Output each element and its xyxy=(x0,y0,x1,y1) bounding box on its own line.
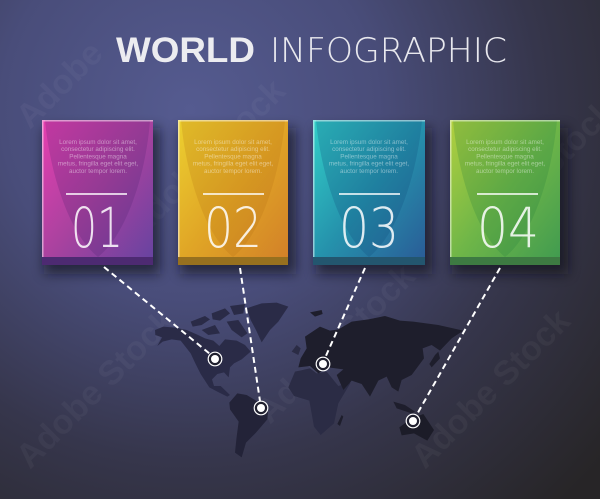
card 1: 01 xyxy=(71,196,123,260)
North America xyxy=(155,327,251,397)
card 3: metus, fringilla eget elit eget, xyxy=(329,161,409,168)
marker: Europe xyxy=(316,357,330,371)
card 1: auctor tempor lorem. xyxy=(69,168,127,175)
connector: card 2 to South America xyxy=(240,268,260,401)
card 1 xyxy=(42,120,160,274)
card 3: Pellentesque magna xyxy=(340,153,398,160)
card 4: 04 xyxy=(477,196,539,260)
card 4: auctor tempor lorem. xyxy=(476,168,534,175)
card 1: metus, fringilla eget elit eget, xyxy=(58,161,138,168)
card 1: Pellentesque magna xyxy=(69,153,127,160)
Eurasia xyxy=(298,316,463,397)
card 4: consectetur adipiscing elit. xyxy=(468,146,542,153)
watermarks: Adobe Stock xyxy=(9,302,183,476)
card 2: 02 xyxy=(204,196,262,260)
card 4: Lorem ipsum dolor sit amet, xyxy=(466,139,544,146)
Australia xyxy=(399,414,434,441)
card 3: 03 xyxy=(339,196,399,260)
Japan and islands xyxy=(429,352,440,367)
Iceland xyxy=(310,310,323,317)
title xyxy=(116,31,507,71)
South America xyxy=(229,393,268,457)
marker: Australia xyxy=(406,414,420,428)
card 4 xyxy=(450,120,568,274)
Africa xyxy=(288,368,351,435)
watermarks: Adobe xyxy=(9,34,110,136)
card 3: auctor tempor lorem. xyxy=(340,168,398,175)
card 2: consectetur adipiscing elit. xyxy=(196,146,270,153)
card 2: Lorem ipsum dolor sit amet, xyxy=(194,139,272,146)
card 1: consectetur adipiscing elit. xyxy=(61,146,135,153)
card 2 xyxy=(178,120,296,274)
connector: card 3 to Europe xyxy=(325,268,365,358)
card 3: Lorem ipsum dolor sit amet, xyxy=(330,139,408,146)
watermarks: Adobe Stock xyxy=(249,257,423,431)
card 1: Lorem ipsum dolor sit amet, xyxy=(59,139,137,146)
Greenland xyxy=(247,303,288,342)
card 2: metus, fringilla eget elit eget, xyxy=(193,161,273,168)
card 4: Pellentesque magna xyxy=(476,153,534,160)
card 3: consectetur adipiscing elit. xyxy=(332,146,406,153)
connector: card 4 to Australia xyxy=(416,268,500,416)
world map xyxy=(155,303,463,457)
marker: South America xyxy=(254,401,268,415)
Arctic islands xyxy=(191,304,247,337)
card 2: auctor tempor lorem. xyxy=(204,168,262,175)
card 3 xyxy=(313,120,432,274)
marker: North America xyxy=(208,352,222,366)
card 2: Pellentesque magna xyxy=(204,153,262,160)
watermarks: Adobe Stock xyxy=(119,72,293,246)
watermarks: Adobe Stock xyxy=(404,302,578,476)
connector: card 1 to North America xyxy=(104,267,210,354)
Madagascar xyxy=(337,415,343,426)
card 4: metus, fringilla eget elit eget, xyxy=(465,161,545,168)
UK xyxy=(292,345,301,355)
title: WORLD xyxy=(116,31,255,70)
title: INFOGRAPHIC xyxy=(270,31,507,71)
